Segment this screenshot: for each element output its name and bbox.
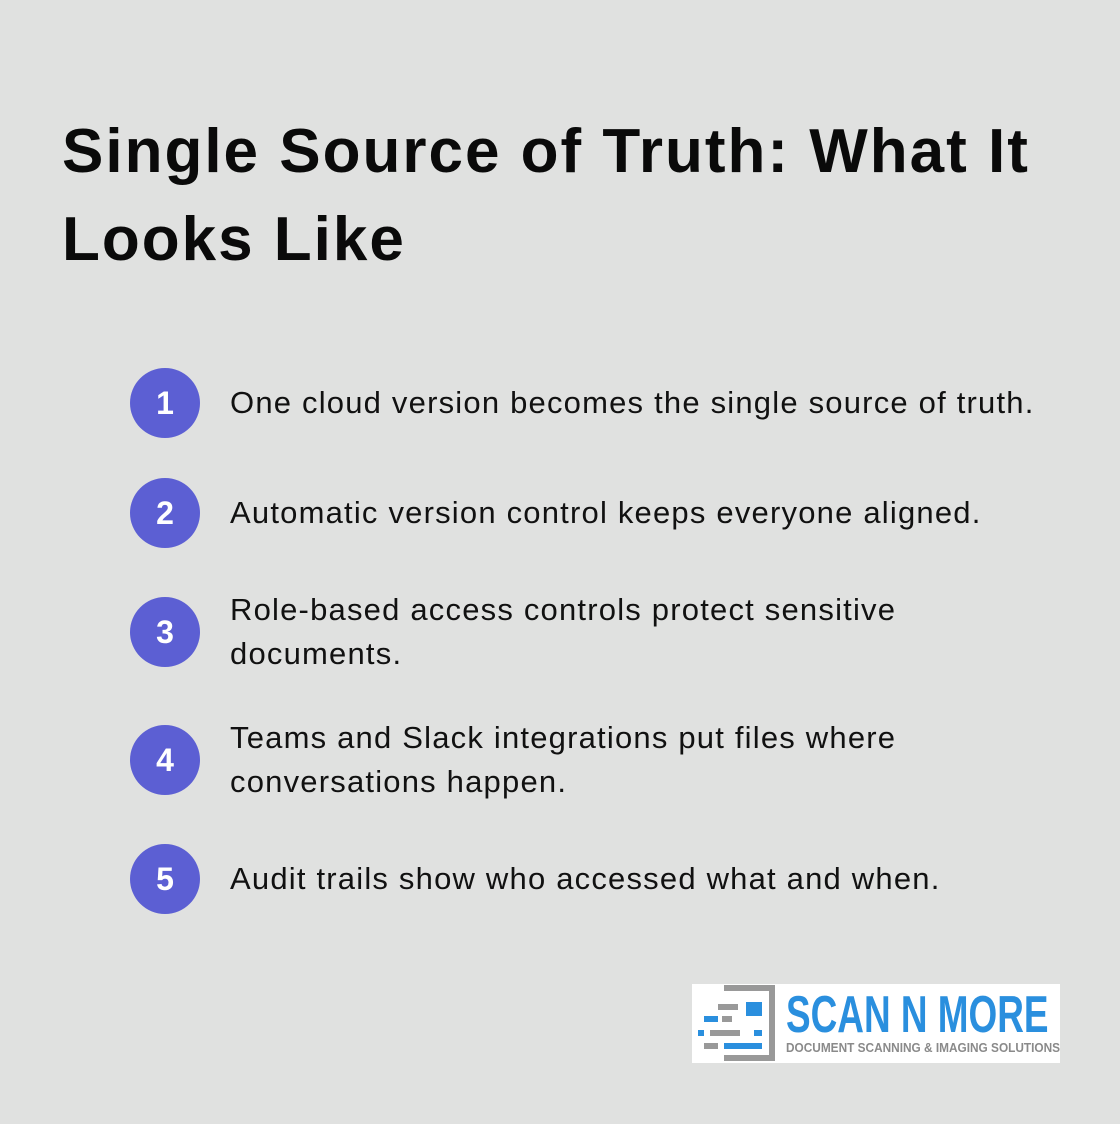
logo icon [698, 985, 775, 1061]
logo: DOCUMENT SCANNING & IMAGING SOLUTIONS [786, 1040, 1060, 1055]
title: Single Source of Truth: What It Looks Like [62, 117, 1030, 274]
logo [692, 984, 1060, 1063]
item 3: Role-based access controls protect sensitive documents. [230, 592, 896, 671]
item 5 [130, 844, 941, 914]
item 5: 5 [156, 861, 174, 897]
item 2: Automatic version control keeps everyone aligned. [230, 495, 982, 530]
item 1: 1 [156, 385, 174, 421]
item 4: Teams and Slack integrations put files where conversations happen. [230, 720, 896, 799]
logo text: SCAN N MORE [786, 986, 1049, 1044]
item 1: One cloud version becomes the single source of truth. [230, 385, 1035, 420]
item 4: 4 [156, 742, 174, 778]
item 1 [130, 368, 1035, 438]
item 2 [130, 478, 982, 548]
item 5: Audit trails show who accessed what and when. [230, 861, 941, 896]
item 3: 3 [156, 614, 174, 650]
item 2: 2 [156, 495, 174, 531]
